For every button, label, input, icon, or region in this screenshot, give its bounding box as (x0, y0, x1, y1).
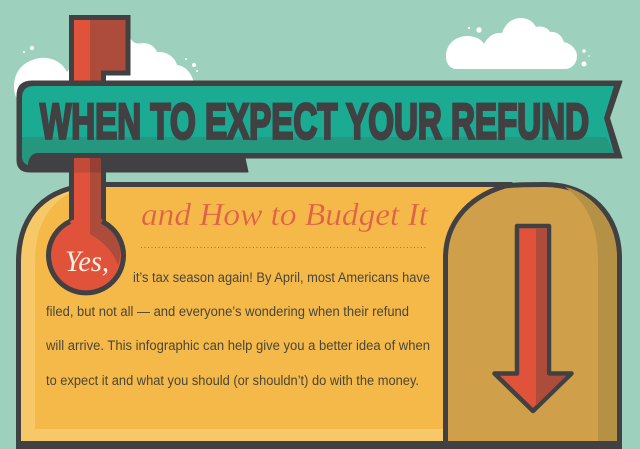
body text: will arrive. This infographic can help give you a better idea of when (45, 338, 430, 353)
cloud: right (446, 18, 590, 69)
cloud: left (14, 38, 198, 97)
flag (72, 18, 128, 84)
body text: to expect it and what you should (or shouldn’t) do with the money. (46, 373, 419, 388)
mailbox arrow (494, 226, 572, 411)
text: Yes: Yes, (65, 245, 109, 278)
body text (45, 270, 430, 388)
dotted divider (141, 246, 428, 248)
mailbox door (443, 184, 622, 449)
subtitle: and How to Budget It (141, 196, 429, 232)
body text: filed, but not all — and everyone’s wondering when their refund (46, 304, 409, 319)
mailbox body (16, 184, 510, 449)
banner (17, 81, 622, 172)
body text: it’s tax season again! By April, most Americans have (133, 270, 430, 285)
flag pole (48, 150, 124, 293)
